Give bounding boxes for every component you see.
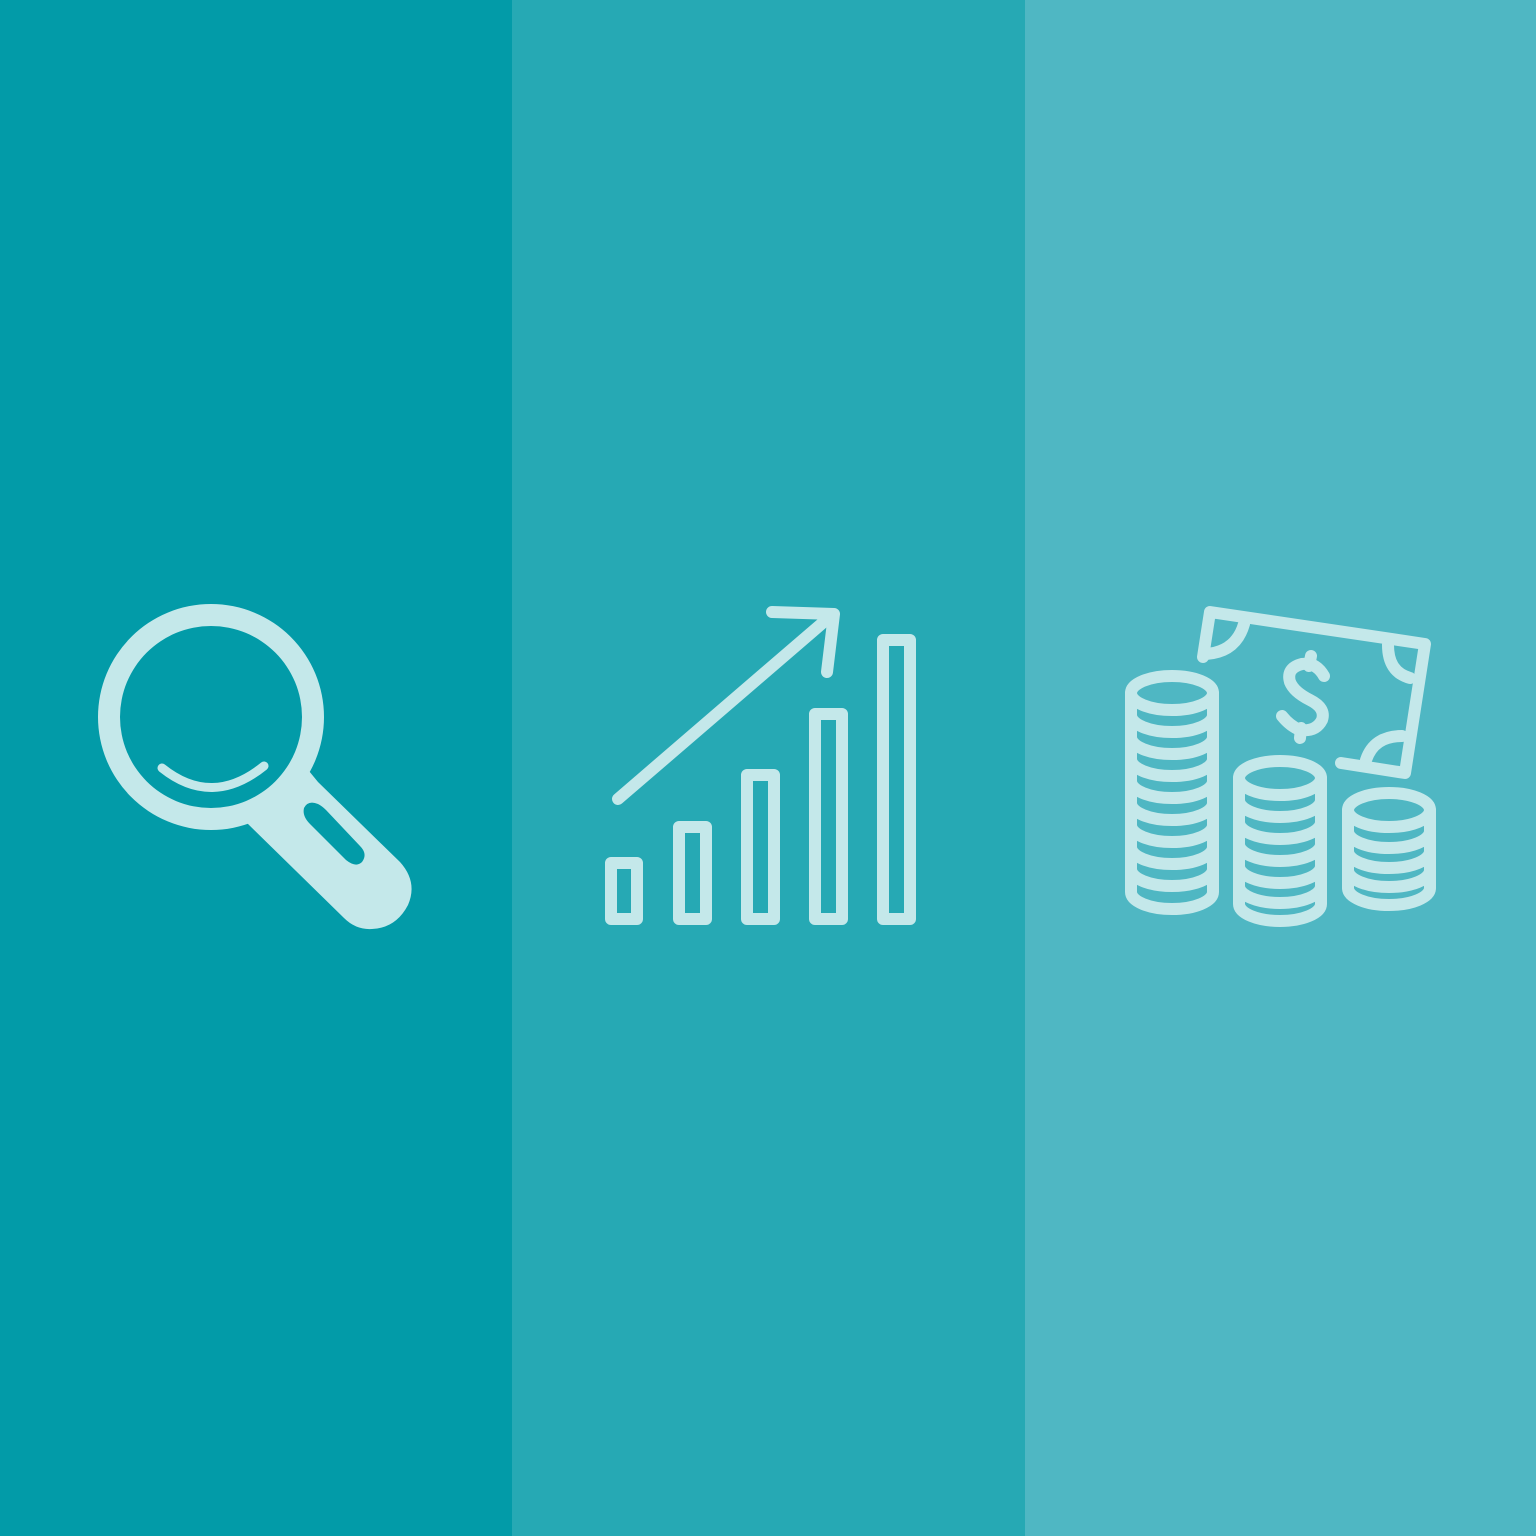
icon: magnifying glass bbox=[98, 604, 412, 929]
panel: right column bbox=[1025, 0, 1536, 1536]
coin stack right bbox=[1348, 793, 1430, 905]
coin stack middle bbox=[1239, 761, 1321, 921]
icon: bar chart with rising arrow bbox=[611, 612, 910, 919]
coin stack left bbox=[1131, 676, 1213, 909]
icon: coins and banknote bbox=[1131, 612, 1430, 921]
banknote bbox=[1203, 612, 1425, 773]
panel: left column bbox=[0, 0, 512, 1536]
panel: middle column bbox=[512, 0, 1025, 1536]
